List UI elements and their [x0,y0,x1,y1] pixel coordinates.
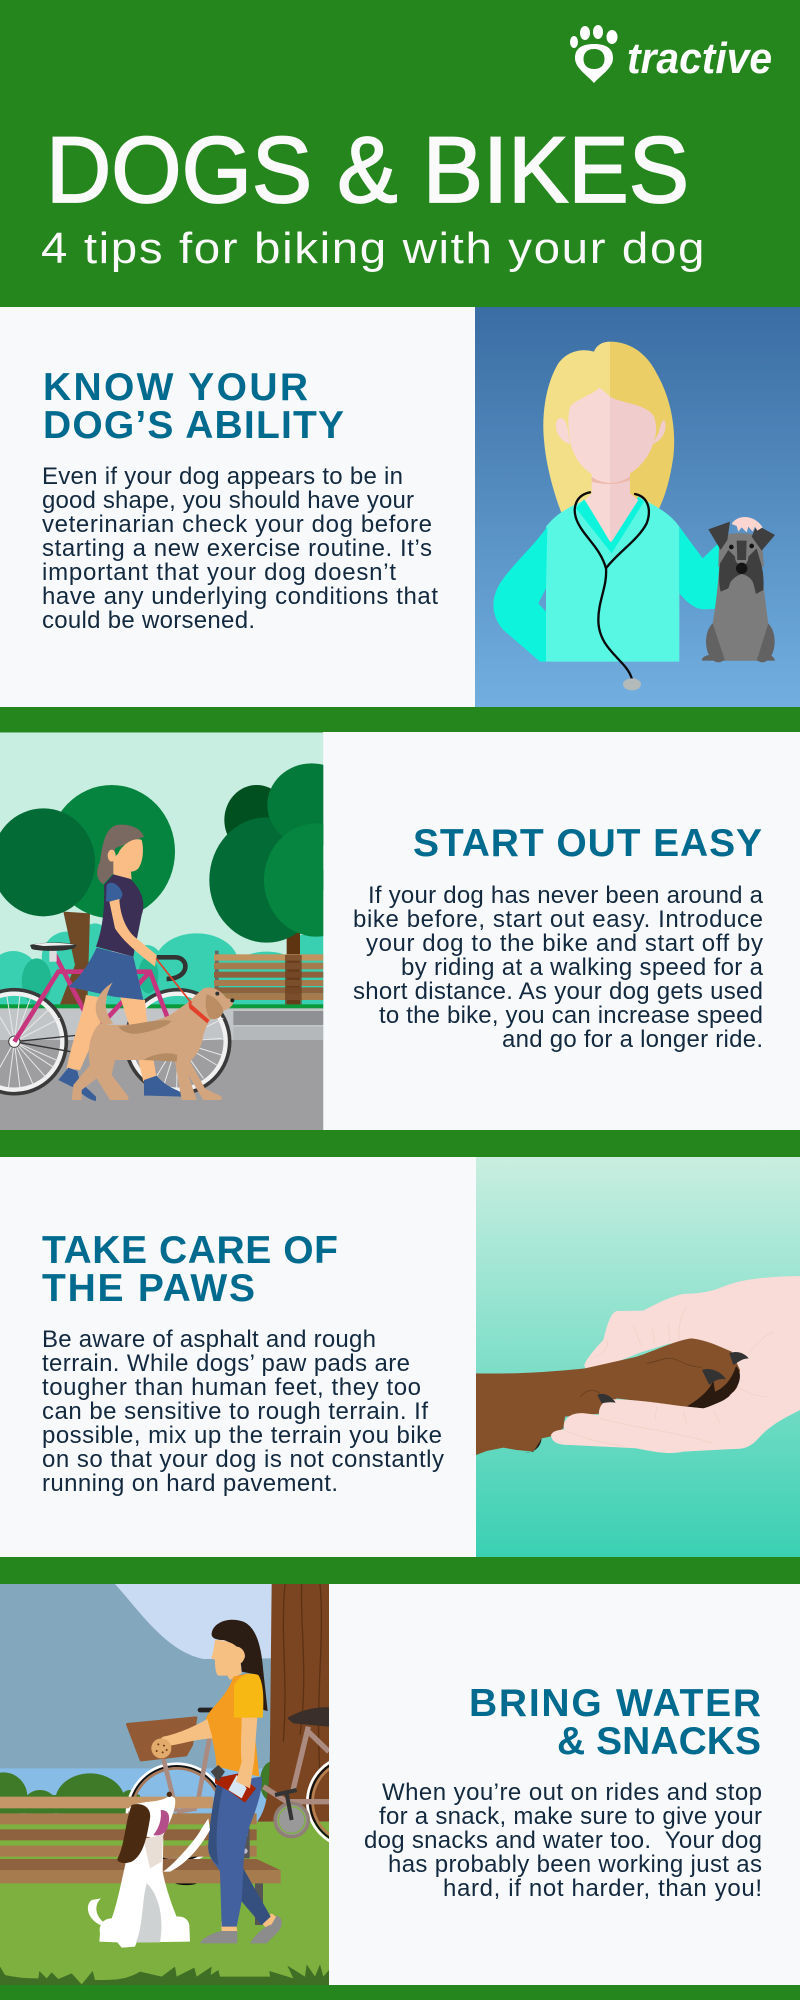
body text: could be worsened. [42,607,255,634]
body text [353,882,764,1053]
panel: take care of the paws [0,1157,800,1557]
panel: start out easy [0,732,800,1130]
body text: bike before, start out easy. Introduce [353,906,763,933]
illustration: vet and schnauzer [475,307,800,707]
body text: starting a new exercise routine. It’s [42,535,432,562]
body text: dog snacks and water too. Your dog [364,1827,762,1854]
heading: START OUT EASY [413,822,762,865]
body text: hard, if not harder, than you! [443,1875,762,1902]
logo: tractive: tractive [627,34,772,83]
illustration: hand holding paw [476,1157,800,1557]
body text: possible, mix up the terrain you bike [42,1422,442,1449]
heading: DOG’S ABILITY [43,404,344,447]
body text: and go for a longer ride. [502,1026,763,1053]
illustration: woman walking bike and dog in park [0,732,324,1130]
illustration: woman giving dog a snack by a bench [0,1584,329,1985]
body text: on so that your dog is not constantly [42,1446,444,1473]
body text: by riding at a walking speed for a [401,954,764,981]
heading: KNOW YOUR [43,366,308,409]
body text: running on hard pavement. [42,1470,338,1497]
body text: important that your dog doesn’t [42,559,396,586]
body text: If your dog has never been around a [368,882,764,909]
body text: for a snack, make sure to give your [379,1803,762,1830]
body text [42,463,438,634]
logo: tractive [570,25,772,83]
panel: know your dog's ability [0,307,800,707]
body text: your dog to the bike and start off by [366,930,763,957]
body text: When you’re out on rides and stop [382,1779,762,1806]
title: DOGS & BIKES [46,117,689,222]
subtitle: 4 tips for biking with your dog [41,224,706,273]
heading [43,366,344,447]
body text: Be aware of asphalt and rough [42,1326,376,1353]
body text: good shape, you should have your [42,487,414,514]
body text: veterinarian check your dog before [42,511,432,538]
body text [42,1326,444,1497]
panel: bring water and snacks [0,1584,800,1985]
heading: TAKE CARE OF [42,1229,338,1272]
body text: to the bike, you can increase speed [379,1002,763,1029]
heading: & SNACKS [557,1720,761,1763]
header banner [0,0,800,307]
heading: BRING WATER [469,1682,761,1725]
body text: Even if your dog appears to be in [42,463,403,490]
heading [42,1229,338,1310]
body text: terrain. While dogs’ paw pads are [42,1350,410,1377]
body text: short distance. As your dog gets used [353,978,763,1005]
body text: have any underlying conditions that [42,583,438,610]
heading: THE PAWS [42,1267,255,1310]
body text: has probably been working just as [388,1851,762,1878]
body text: can be sensitive to rough terrain. If [42,1398,428,1425]
body text: tougher than human feet, they too [42,1374,421,1401]
body text [364,1779,762,1902]
heading [469,1682,761,1763]
